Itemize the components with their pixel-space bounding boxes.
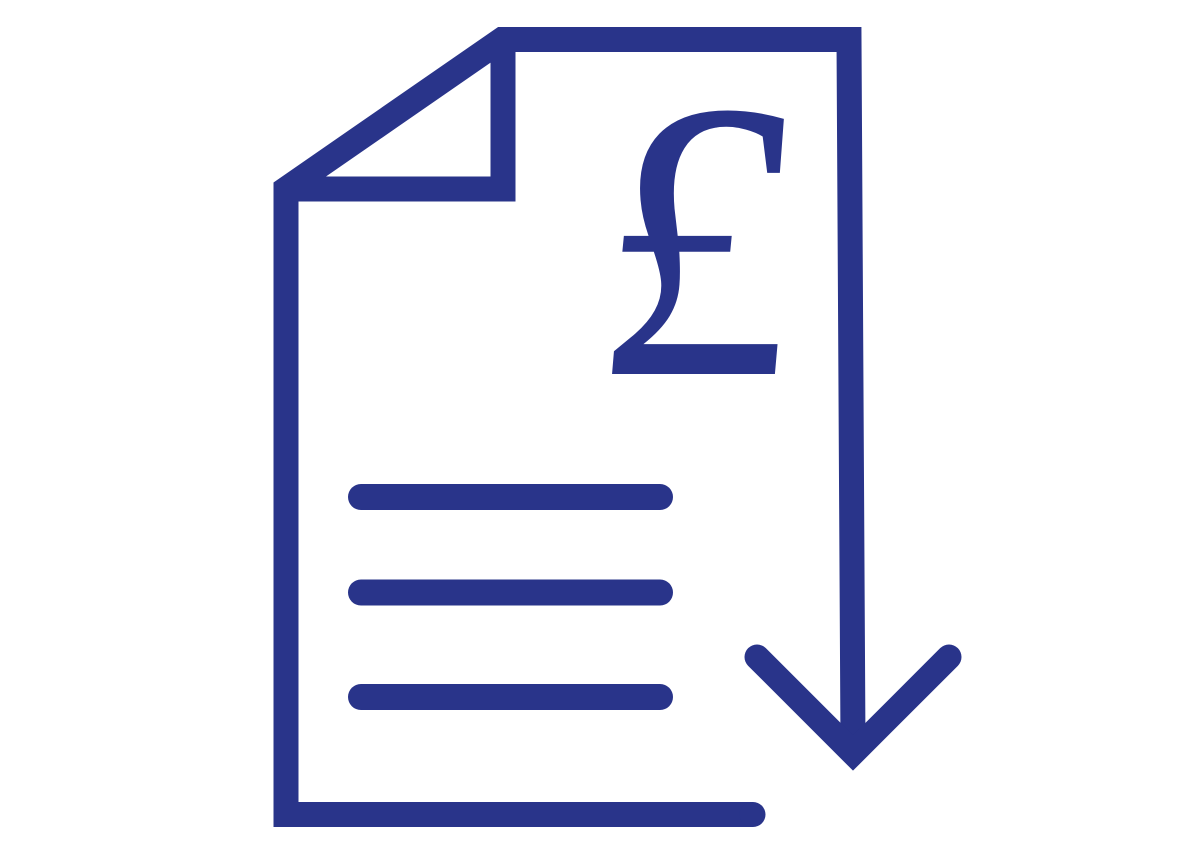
document outline with downward arrow stem	[286, 40, 853, 814]
text lines	[361, 497, 660, 697]
pound sign: £	[576, 21, 820, 461]
folded corner	[286, 40, 503, 189]
arrow head	[757, 657, 949, 753]
